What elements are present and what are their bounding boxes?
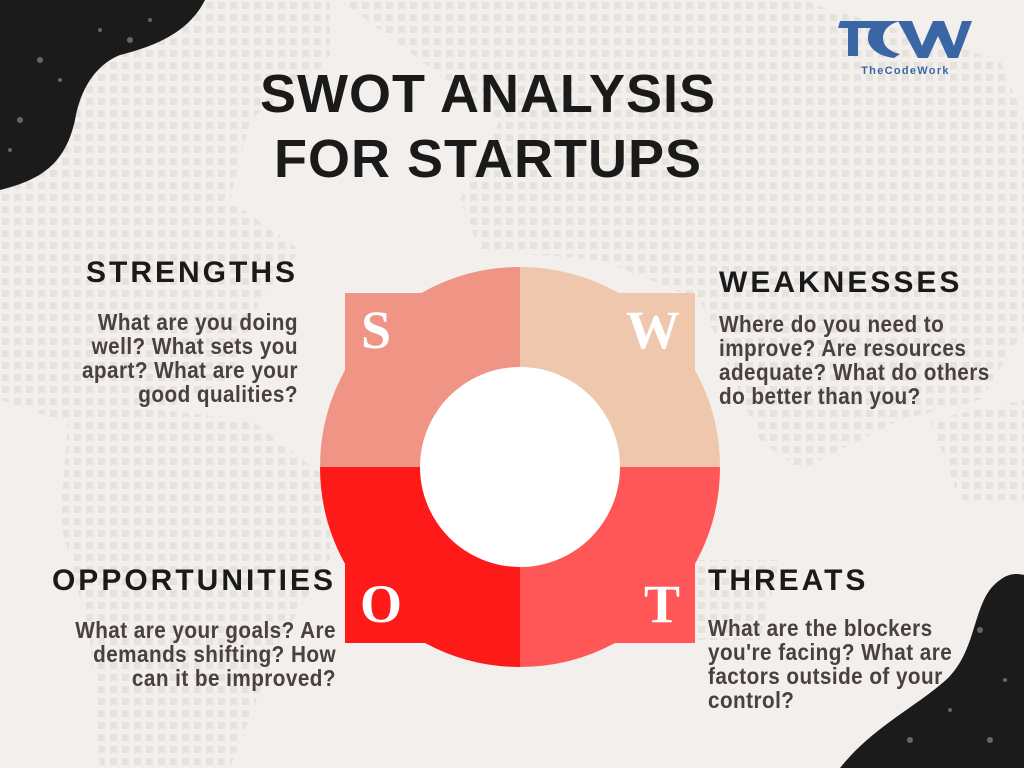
swot diagram: S <box>361 300 391 360</box>
title: SWOT ANALYSIS <box>260 64 716 124</box>
panel: threats: you're facing? What are <box>708 639 952 665</box>
panel: weaknesses: do better than you? <box>719 383 921 409</box>
panel: threats: THREATS <box>708 564 868 597</box>
panel: threats: factors outside of your <box>708 663 943 689</box>
panel: opportunities: What are your goals? Are <box>75 617 336 643</box>
panel: strengths: good qualities? <box>138 381 298 407</box>
panel: weaknesses: Where do you need to <box>719 311 944 337</box>
panel: opportunities: can it be improved? <box>132 665 336 691</box>
title: FOR STARTUPS <box>274 129 702 189</box>
panel: weaknesses: adequate? What do others <box>719 359 990 385</box>
swot diagram: T <box>644 574 680 634</box>
panel: strengths <box>82 256 298 407</box>
panel: weaknesses: improve? Are resources <box>719 335 966 361</box>
panel: weaknesses <box>719 266 990 409</box>
title <box>260 64 716 189</box>
panel: opportunities <box>52 564 336 691</box>
panel: threats: control? <box>708 687 794 713</box>
decorative grunge blob top-left <box>0 0 205 190</box>
panel: threats: What are the blockers <box>708 615 933 641</box>
swot diagram <box>320 267 720 667</box>
panel: opportunities: demands shifting? How <box>93 641 336 667</box>
panel: opportunities: OPPORTUNITIES <box>52 564 336 597</box>
panel: threats <box>708 564 952 713</box>
decorative grunge blob bottom-right <box>840 574 1024 768</box>
panel: strengths: STRENGTHS <box>86 256 298 289</box>
swot diagram: O <box>360 574 402 634</box>
panel: strengths: well? What sets you <box>92 333 298 359</box>
logo: TheCodeWork <box>838 21 972 77</box>
swot diagram: W <box>626 300 680 360</box>
logo: TheCodeWork: TheCodeWork <box>861 65 950 77</box>
panel: weaknesses: WEAKNESSES <box>719 266 962 299</box>
panel: strengths: What are you doing <box>98 309 298 335</box>
panel: strengths: apart? What are your <box>82 357 298 383</box>
